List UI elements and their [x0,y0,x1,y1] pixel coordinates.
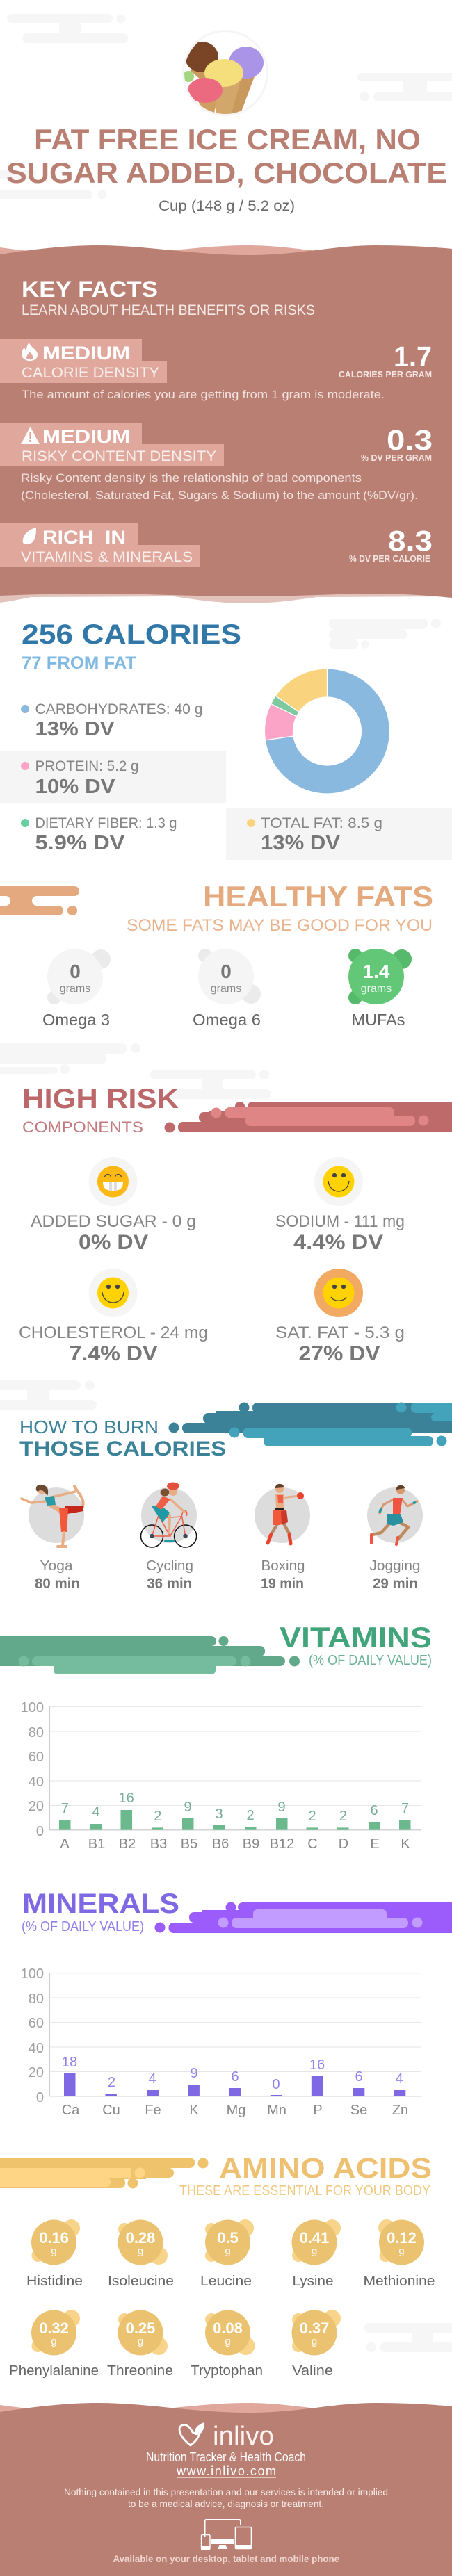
amino: isoleucine: Isoleucine [108,2274,174,2289]
subheading: amino acids: THESE ARE ESSENTIAL FOR YOUR BODY [179,2183,430,2199]
legend: protein [21,758,139,798]
subheading: key facts: LEARN ABOUT HEALTH BENEFITS OR RISKS [22,302,315,318]
bar chart: minerals: Mg [227,2103,245,2118]
stat: omega 6 [193,949,261,1029]
legend: total fat [247,815,382,854]
risk: cholesterol [19,1269,208,1365]
risk: saturated fat: 27% DV [299,1342,380,1365]
amino: threonine: Threonine [107,2363,173,2379]
heading: how to burn: HOW TO BURN [19,1417,159,1437]
amino: lysine: 0.41 [300,2229,329,2247]
bar chart: minerals [21,1966,421,2118]
bar chart: vitamins: B9 [243,1836,259,1852]
heading: high risk: HIGH RISK [22,1084,179,1114]
fact: risky content density: MEDIUM [42,426,130,447]
amino: phenylalanine [9,2310,99,2379]
subheading: healthy fats: SOME FATS MAY BE GOOD FOR YOU [127,916,433,935]
bar chart: minerals: K [189,2103,199,2118]
bar chart: minerals: 18 [62,2055,77,2070]
bar chart: vitamins: B1 [88,1836,105,1852]
exercise: boxing [255,1484,310,1592]
amino: tryptophan: Tryptophan [191,2363,263,2379]
exercise: cycling: Cycling [146,1558,193,1574]
fact: risky content density: 0.3 [387,424,433,456]
bar chart: vitamins: B3 [150,1836,167,1852]
amino: threonine [107,2310,173,2379]
amino: phenylalanine: 0.32 [39,2320,69,2337]
decoration: purple bars [154,1902,452,1933]
bar chart: minerals: 60 [29,2016,44,2031]
amino: methionine: 0.12 [387,2229,417,2247]
fact: calorie density: CALORIES PER GRAM [339,369,432,380]
amino: valine: 0.37 [300,2320,329,2337]
bar chart: minerals: 40 [29,2041,44,2056]
legend: total fat: TOTAL FAT: 8.5 g [261,815,382,831]
stat: omega 3 [42,949,111,1029]
bar chart: vitamins: 40 [29,1775,44,1790]
amino: histidine [26,2219,83,2289]
stat: omega 3: grams [60,983,90,995]
bar chart: vitamins: 3 [215,1807,223,1822]
amino: isoleucine [108,2220,174,2289]
disclaimer [64,2486,388,2509]
subheading: from fat: 77 FROM FAT [22,653,136,673]
bar chart: minerals: 9 [190,2066,198,2081]
tagline: Nutrition Tracker & Health Coach [146,2450,306,2464]
amino: leucine [200,2219,254,2289]
fact: calorie density: MEDIUM [42,343,130,364]
legend: dietary fiber [21,815,177,854]
bar chart: vitamins: 60 [29,1750,44,1765]
decoration: orange bars [0,886,79,915]
bar chart: vitamins: D [339,1836,348,1852]
bar chart: vitamins: 7 [61,1801,69,1816]
amino: phenylalanine: g [51,2335,57,2347]
fact: risky content density: % DV PER GRAM [361,453,432,463]
bar chart: minerals: Ca [62,2103,80,2118]
stat: omega 6: grams [211,983,241,995]
stat: mufas: 1.4 [363,961,390,982]
subheading: minerals: (% OF DAILY VALUE) [22,1919,144,1934]
heading: healthy fats: HEALTHY FATS [203,880,433,913]
panel: how to burn [19,1403,452,1592]
bar chart: minerals: 4 [395,2071,403,2087]
bar chart: vitamins: 100 [21,1700,44,1715]
amino: phenylalanine: Phenylalanine [9,2363,99,2379]
exercise: yoga [22,1485,84,1592]
amino: tryptophan: 0.08 [213,2320,243,2337]
amino: valine: Valine [292,2363,333,2379]
amino: lysine [292,2219,341,2289]
panel: key facts [0,245,452,603]
fact: rich in vitamins and minerals: % DV PER CALORIE [349,553,430,564]
exercise: boxing: 19 min [261,1576,304,1592]
bar chart: minerals: 6 [231,2069,239,2085]
fact: rich in vitamins and minerals: 8.3 [388,525,433,557]
bar chart: vitamins: 2 [154,1809,161,1824]
exercise: yoga: Yoga [40,1558,73,1574]
heading: amino acids: AMINO ACIDS [219,2152,432,2184]
amino: valine: g [312,2335,317,2347]
amino: tryptophan: g [225,2335,231,2347]
legend: carbohydrates: CARBOHYDRATES: 40 g [35,701,203,717]
bar chart: minerals: 100 [21,1966,44,1982]
decoration: yellow bars [0,2158,209,2188]
panel: amino acids [0,2152,435,2379]
bar chart: vitamins: B2 [119,1836,136,1852]
bar chart: vitamins: 20 [29,1799,44,1814]
donut chart: macronutrients [264,669,389,794]
subheading: components: COMPONENTS [22,1118,143,1136]
title: FAT FREE ICE CREAM, NO [34,123,421,156]
legend: protein: 10% DV [35,776,115,798]
bar chart: minerals: Se [350,2103,367,2118]
bar chart: vitamins: 6 [370,1803,378,1818]
stat: omega 3: Omega 3 [42,1011,110,1029]
bar chart: minerals: 6 [355,2069,363,2085]
fact: risky content density: (Cholesterol, Saturated Fat, Sugars & Sodium) to the amount (%DV/gr). [21,489,418,502]
bar chart: vitamins: A [60,1836,70,1852]
risk: cholesterol: 7.4% DV [70,1342,157,1365]
bar chart: minerals: 4 [148,2071,156,2087]
exercise: jogging: 29 min [373,1576,418,1592]
bar chart: vitamins: C [307,1836,318,1852]
panel: healthy fats [0,880,433,1029]
fact: calorie density [0,339,432,401]
availability note: Available on your desktop, tablet and mobile phone [113,2553,339,2564]
heading: key facts: KEY FACTS [22,277,158,302]
fact: rich in vitamins and minerals [0,523,433,567]
subheading: vitamins: (% OF DAILY VALUE) [309,1653,432,1668]
amino: threonine: 0.25 [126,2320,155,2337]
bar chart: minerals: 16 [309,2057,325,2073]
stat: mufas [348,949,412,1029]
decoration: red bars [164,1102,452,1133]
legend: dietary fiber: 5.9% DV [35,832,125,854]
fact: risky content density: Risky Content density is the relationship of bad components [21,471,362,484]
bar chart: vitamins: K [401,1836,410,1852]
legend: carbohydrates: 13% DV [35,718,115,740]
amino: leucine: Leucine [200,2274,252,2289]
logo: inlivo: inlivo [213,2422,274,2451]
amino: methionine: Methionine [363,2274,435,2289]
amino: isoleucine: g [138,2245,143,2257]
bar chart: vitamins: B5 [181,1836,197,1852]
bar chart: minerals: 20 [29,2065,44,2080]
fact: calorie density: CALORIE DENSITY [22,365,159,381]
heading: calories: 256 CALORIES [22,619,241,650]
bar chart: vitamins: 9 [277,1800,286,1815]
fact: rich in vitamins and minerals: VITAMINS & MINERALS [21,549,193,565]
disclaimer: to be a medical advice, diagnosis or treatment. [128,2498,324,2509]
stat: mufas: grams [361,983,392,995]
fact: calorie density: 1.7 [394,341,432,373]
amino: threonine: g [138,2335,143,2347]
bar chart: vitamins: 2 [246,1808,255,1823]
bar chart: vitamins: B6 [212,1836,229,1852]
exercise: yoga: 80 min [35,1576,80,1592]
bar chart: vitamins: 0 [36,1824,44,1839]
stat: omega 3: 0 [70,961,81,982]
bar chart: vitamins: 2 [308,1809,316,1824]
risk: cholesterol: CHOLESTEROL - 24 mg [19,1323,208,1342]
stat: mufas: MUFAs [352,1011,405,1029]
exercise: jogging: Jogging [370,1558,420,1574]
panel: footer [0,2403,452,2576]
bar chart: minerals: 2 [108,2075,115,2090]
bar chart: vitamins: B12 [270,1836,294,1852]
legend: total fat: 13% DV [261,832,341,854]
risk: saturated fat: SAT. FAT - 5.3 g [275,1323,405,1342]
amino: methionine [363,2219,435,2289]
exercise: jogging [367,1485,423,1592]
website link: www.inlivo.com [176,2464,276,2478]
heading: minerals: MINERALS [22,1889,179,1919]
bar chart: minerals: 0 [272,2077,280,2092]
title [6,123,447,189]
heading: vitamins: VITAMINS [280,1621,432,1654]
bar chart: vitamins: 9 [184,1800,192,1815]
stat: omega 6: 0 [220,961,232,982]
amino: tryptophan [191,2310,263,2379]
legend: dietary fiber: DIETARY FIBER: 1.3 g [35,815,177,831]
title: SUGAR ADDED, CHOCOLATE [6,156,447,189]
amino: histidine: g [51,2245,57,2257]
amino: leucine: g [225,2245,231,2257]
bar chart: vitamins: 2 [339,1809,347,1824]
amino: methionine: g [398,2245,405,2257]
bar chart: minerals: 80 [29,1991,44,2007]
logo: inlivo [179,2422,274,2451]
disclaimer: Nothing contained in this presentation and our services is intended or implied [64,2486,388,2497]
bar chart: vitamins: E [370,1836,380,1852]
panel: high risk [19,1084,452,1365]
panel: minerals [21,1889,452,2118]
amino: valine [292,2310,341,2379]
exercise: boxing: Boxing [261,1558,305,1574]
amino: leucine: 0.5 [217,2229,239,2247]
bar chart: minerals: Mn [267,2103,286,2118]
amino: histidine: 0.16 [39,2229,69,2247]
risk: saturated fat [275,1269,405,1365]
risk: sodium [275,1157,405,1254]
fact: risky content density: RISKY CONTENT DENSITY [22,448,216,464]
bar chart: vitamins [21,1700,421,1852]
amino: isoleucine: 0.28 [126,2229,155,2247]
bar chart: vitamins: 16 [118,1791,134,1806]
fact: calorie density: The amount of calories you are getting from 1 gram is moderate. [22,388,385,401]
fact: rich in vitamins and minerals: RICH IN [42,527,126,548]
risk: sodium: SODIUM - 111 mg [275,1212,405,1231]
stat: omega 6: Omega 6 [193,1011,261,1029]
icon: ice cream photo [182,30,268,116]
amino: lysine: Lysine [292,2274,334,2289]
fact: risky content density [0,423,433,502]
icon: devices [201,2520,252,2550]
bar chart: minerals: Zn [392,2103,408,2118]
amino: histidine: Histidine [26,2274,83,2289]
risk: added sugar: 0% DV [79,1231,148,1254]
bar chart: minerals: P [313,2103,323,2118]
bar chart: minerals: Cu [102,2103,120,2118]
decoration: green bars [0,1636,300,1674]
bar chart: vitamins: 80 [29,1725,44,1741]
exercise: cycling [140,1482,197,1592]
amino: lysine: g [312,2245,317,2257]
panel: vitamins [0,1621,432,1852]
legend: carbohydrates [21,701,203,740]
bar chart: minerals: Fe [145,2103,161,2118]
exercise: cycling: 36 min [147,1576,192,1592]
bar chart: vitamins: 4 [92,1804,100,1820]
risk: added sugar [31,1157,196,1254]
risk: sodium: 4.4% DV [293,1231,383,1254]
heading: those calories: THOSE CALORIES [19,1437,226,1460]
risk: added sugar: ADDED SUGAR - 0 g [31,1212,196,1231]
bar chart: minerals: 0 [36,2090,44,2105]
legend: protein: PROTEIN: 5.2 g [35,758,139,774]
serving size: Cup (148 g / 5.2 oz) [159,198,295,214]
bar chart: vitamins: 7 [401,1801,409,1816]
panel: calories [0,619,452,860]
decoration: teal bars [168,1403,452,1446]
